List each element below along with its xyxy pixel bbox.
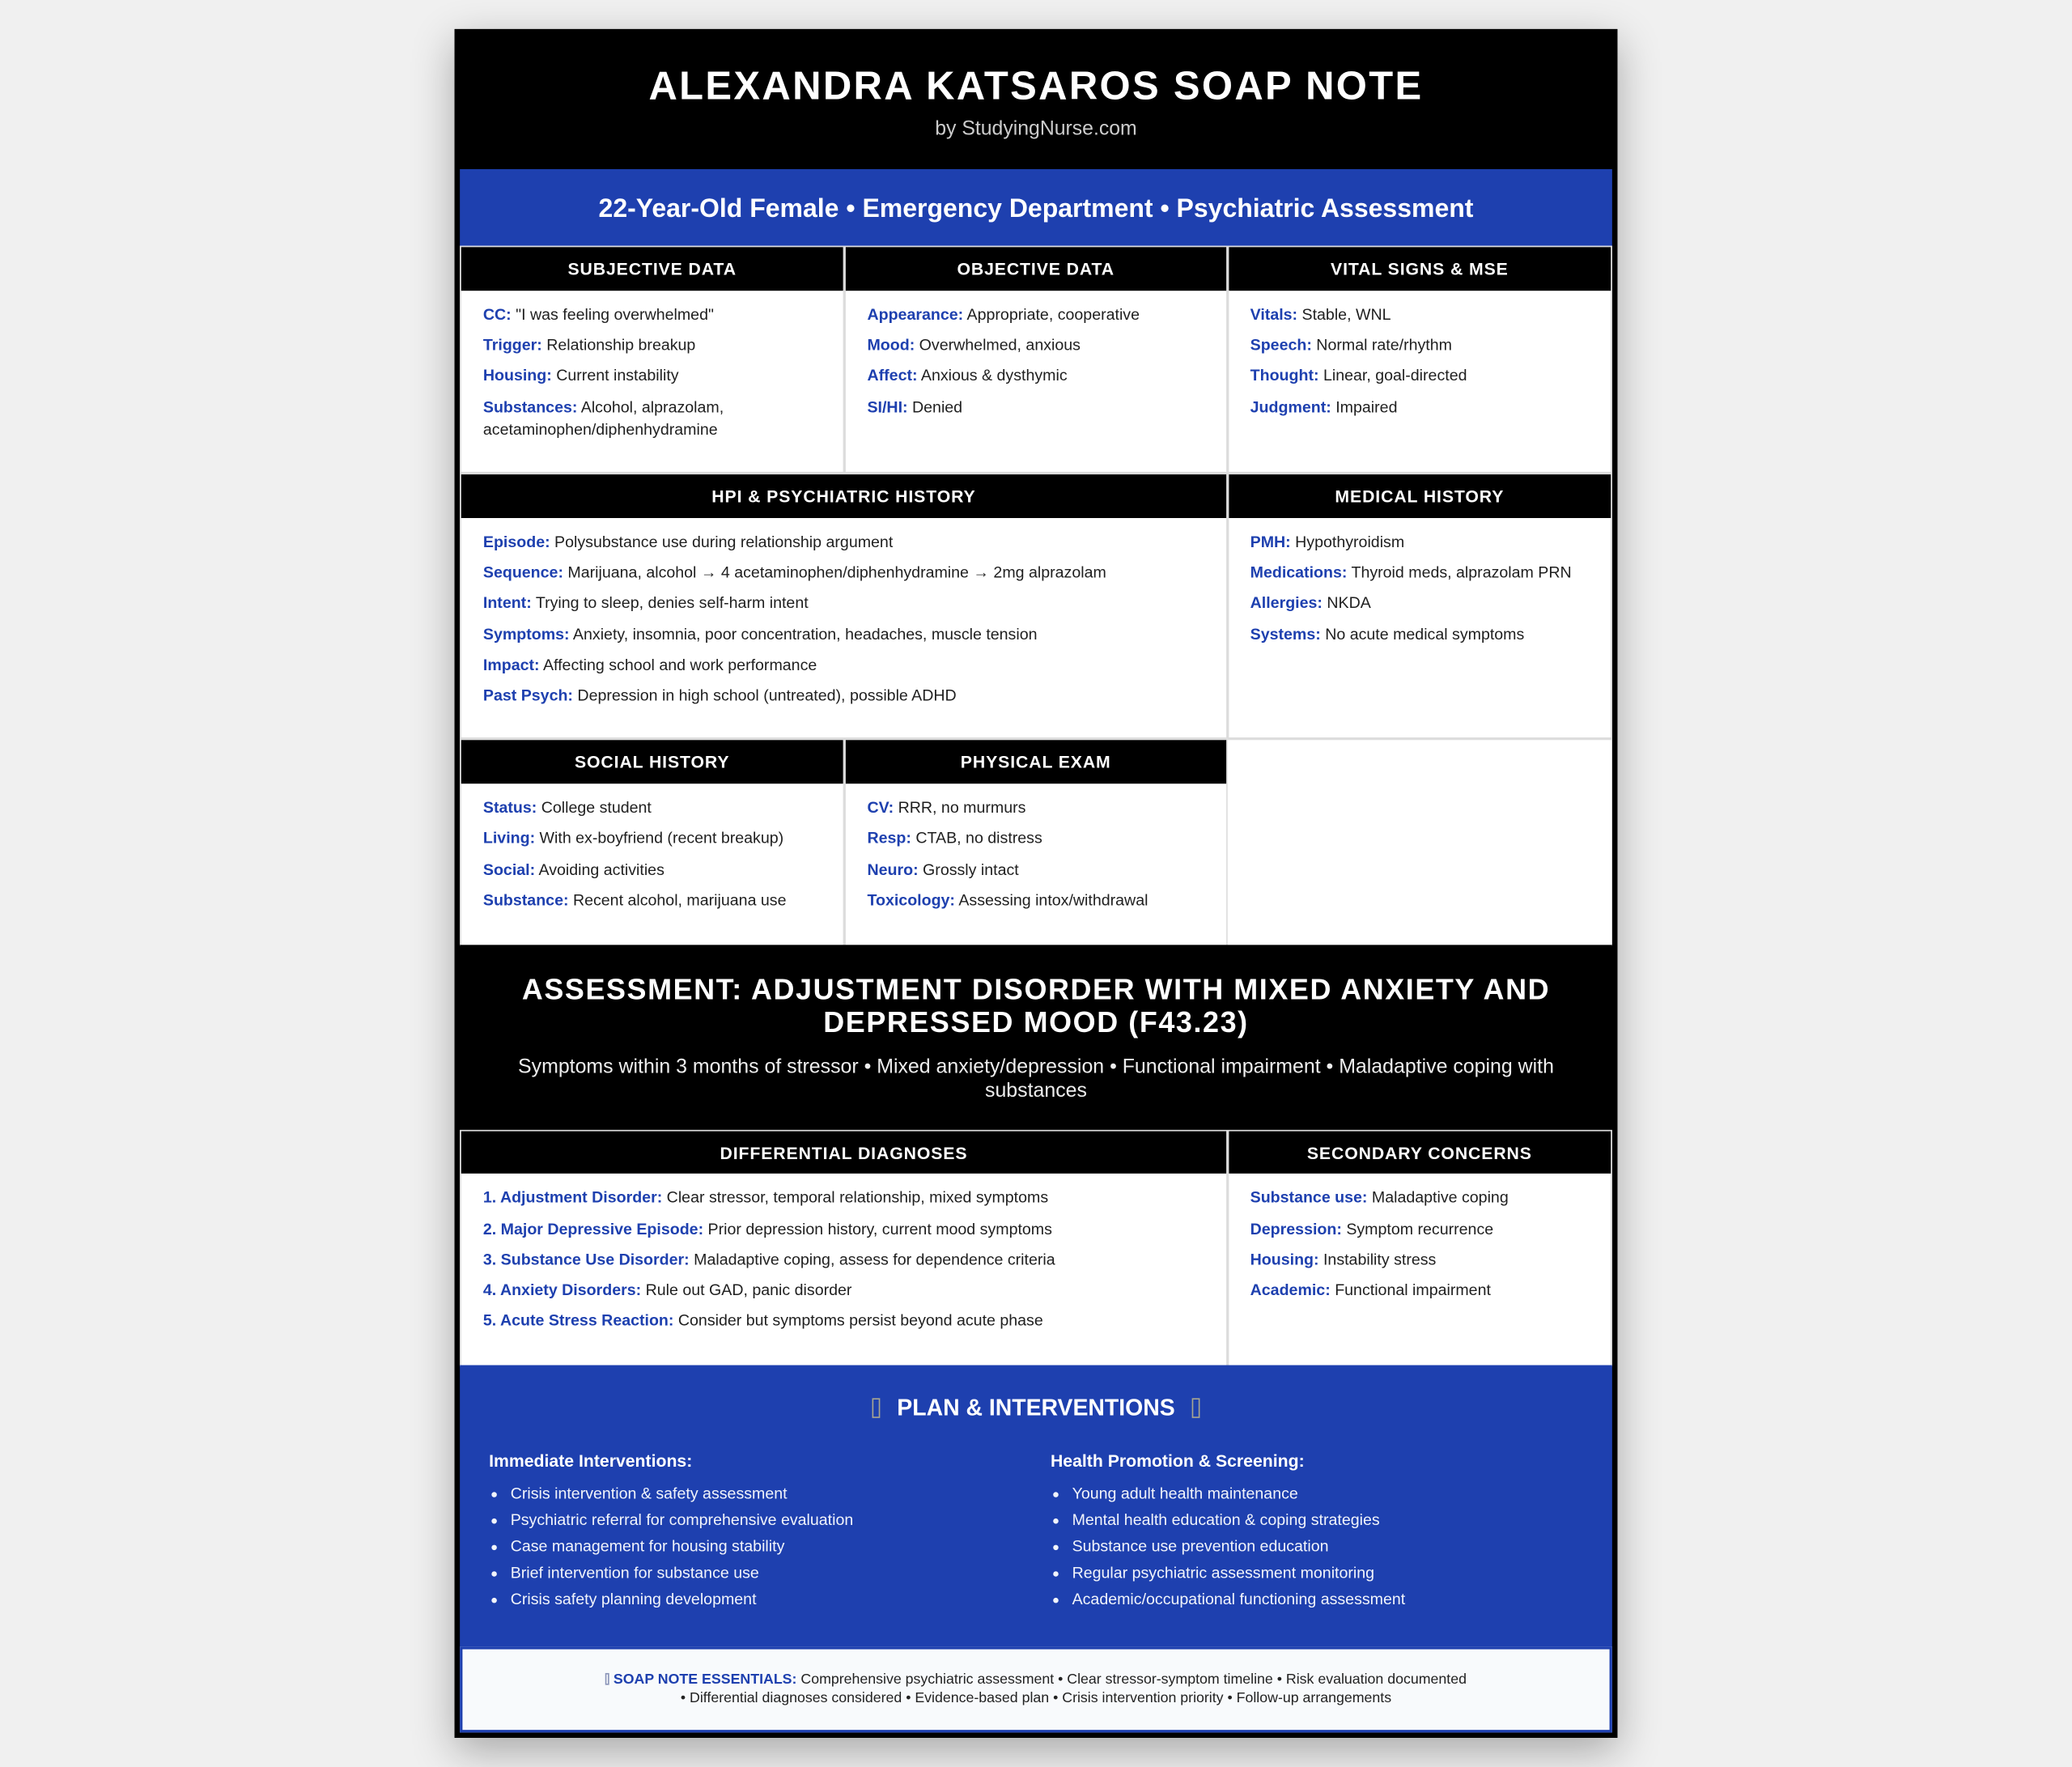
text: subjective items [483, 305, 724, 439]
heading: secondary concerns: SECONDARY CONCERNS [1307, 1142, 1532, 1162]
heading: objective data: OBJECTIVE DATA [957, 259, 1115, 278]
text: vital items: Judgment: Impaired [1250, 397, 1397, 416]
text: exam items: Toxicology: Assessing intox/withdrawal [867, 890, 1148, 909]
panel: vital signs and mse [1227, 246, 1612, 473]
panel: hpi and psychiatric history [460, 473, 1228, 739]
heading: medical history [1229, 474, 1611, 517]
panel: plan and interventions [460, 1366, 1612, 1732]
text: vital items [1250, 305, 1467, 416]
heading: physical exam [845, 740, 1226, 783]
list: health promotion: Academic/occupational functioning assessment [1072, 1591, 1405, 1608]
text: social items: Status: College student [483, 798, 652, 817]
text: exam items: Resp: CTAB, no distress [867, 829, 1042, 847]
list: immediate: Case management for housing stability [511, 1537, 784, 1556]
assessment heading: ASSESSMENT: ADJUSTMENT DISORDER WITH MIXED ANXIETY AND [522, 973, 1550, 1005]
footer callout [460, 1646, 1612, 1732]
list: health promotion: Mental health education & coping strategies [1072, 1511, 1380, 1529]
list: health promotion: Young adult health maintenance [1072, 1485, 1298, 1503]
text: hpi items: Impact: Affecting school and work performance [483, 656, 817, 674]
text: vital items: Thought: Linear, goal-directed [1250, 367, 1467, 385]
text: differential list: 4. Anxiety Disorders: Rule out GAD, panic disorder [483, 1281, 851, 1299]
heading: subjective data: SUBJECTIVE DATA [567, 259, 737, 278]
subheading: health promotion: Health Promotion & Screening: [1051, 1451, 1305, 1471]
text: objective items [867, 305, 1140, 416]
heading: secondary concerns [1229, 1131, 1611, 1174]
patient banner [460, 168, 1612, 246]
text: vital items: Vitals: Stable, WNL [1250, 305, 1391, 324]
assessment criteria: substances [985, 1080, 1087, 1102]
heading: social history [461, 740, 843, 783]
text: differential list: 3. Substance Use Disorder: Maladaptive coping, assess for dependence criteria [483, 1250, 1055, 1268]
list: health promotion: Regular psychiatric assessment monitoring [1072, 1564, 1374, 1582]
text: medical items: PMH: Hypothyroidism [1250, 533, 1404, 550]
list: immediate: Brief intervention for substance use [511, 1564, 759, 1582]
text: secondary items: Academic: Functional impairment [1250, 1281, 1491, 1299]
panel: assessment [460, 945, 1612, 1130]
assessment heading: DEPRESSED MOOD (F43.23) [823, 1005, 1249, 1039]
footer callout: SOAP NOTE ESSENTIALS: Comprehensive psychiatric assessment • Clear stressor-symptom timeline • Risk evaluation documented [614, 1671, 1467, 1688]
footer callout: • Differential diagnoses considered • Evidence-based plan • Crisis intervention priority • Follow-up arrangements [681, 1691, 1391, 1706]
text: social items: Social: Avoiding activities [483, 860, 664, 878]
heading: hpi: HPI & PSYCHIATRIC HISTORY [711, 486, 976, 506]
text: secondary items: Substance use: Maladaptive coping [1250, 1188, 1509, 1207]
list: health promotion [1053, 1485, 1405, 1608]
column: immediate interventions [489, 1451, 853, 1608]
heading: vital signs: VITAL SIGNS & MSE [1331, 259, 1509, 278]
assessment criteria [518, 1056, 1554, 1102]
text: exam items: Neuro: Grossly intact [867, 860, 1019, 878]
list: immediate: Crisis intervention & safety assessment [511, 1485, 788, 1503]
text: hpi items: Intent: Trying to sleep, denies self-harm intent [483, 594, 809, 613]
text: secondary items: Depression: Symptom recurrence [1250, 1219, 1493, 1238]
text: medical items [1250, 533, 1572, 644]
card [455, 29, 1617, 1738]
text: secondary items [1250, 1188, 1509, 1299]
text: hpi items: Past Psych: Depression in high school (untreated), possible ADHD [483, 686, 957, 705]
text: exam items [867, 798, 1148, 909]
text: hpi items [483, 533, 1106, 705]
text: differential list: 2. Major Depressive Episode: Prior depression history, current mood symptoms [483, 1219, 1052, 1238]
text: medical items: Systems: No acute medical symptoms [1250, 625, 1524, 644]
column: health promotion [1051, 1451, 1405, 1608]
text: vital items: Speech: Normal rate/rhythm [1250, 336, 1452, 355]
panel: objective data [844, 246, 1228, 473]
text: social items: Substance: Recent alcohol, marijuana use [483, 890, 787, 909]
text: differential list [483, 1188, 1055, 1330]
panel: physical exam [844, 739, 1228, 945]
heading: vital signs [1229, 247, 1611, 291]
text: differential list: 1. Adjustment Disorder: Clear stressor, temporal relationship, mixed symptoms [483, 1188, 1048, 1207]
text: social items: Living: With ex-boyfriend (recent breakup) [483, 829, 783, 847]
heading: social history: SOCIAL HISTORY [575, 752, 729, 771]
text: objective items: Mood: Overwhelmed, anxious [867, 336, 1081, 355]
heading: physical exam: PHYSICAL EXAM [961, 752, 1111, 771]
panel: empty cell [1226, 739, 1612, 945]
byline: by StudyingNurse.com [935, 117, 1137, 140]
panel: secondary concerns [1227, 1129, 1612, 1366]
panel: social history [460, 739, 844, 945]
text: subjective items: Housing: Current instability [483, 367, 679, 385]
assessment heading [522, 973, 1550, 1039]
text: hpi items: Symptoms: Anxiety, insomnia, poor concentration, headaches, muscle tension [483, 625, 1038, 644]
heading: subjective data [461, 247, 843, 291]
text: objective items: Appearance: Appropriate, cooperative [867, 305, 1140, 324]
text: hpi items: Sequence: Marijuana, alcohol → 4 acetaminophen/diphenhydramine → 2mg alprazolam [483, 563, 1106, 581]
text: medical items: Allergies: NKDA [1250, 594, 1371, 613]
patient banner: 22-Year-Old Female • Emergency Department • Psychiatric Assessment [599, 193, 1473, 223]
text: hpi items: Episode: Polysubstance use during relationship argument [483, 533, 893, 550]
subheading: immediate: Immediate Interventions: [489, 1451, 692, 1471]
panel: medical history [1227, 473, 1612, 739]
heading: hpi [461, 474, 1226, 517]
list: immediate: Psychiatric referral for comprehensive evaluation [511, 1511, 853, 1529]
panel: subjective data [460, 246, 844, 473]
text: subjective items: CC: "I was feeling overwhelmed" [483, 305, 714, 324]
text: subjective items: Trigger: Relationship breakup [483, 336, 695, 355]
panel: differential diagnoses [460, 1129, 1228, 1366]
heading: medical history: MEDICAL HISTORY [1335, 486, 1504, 506]
text: objective items: Affect: Anxious & dysthymic [867, 367, 1068, 385]
plan heading: PLAN & INTERVENTIONS [897, 1394, 1175, 1421]
text: social items [483, 798, 787, 909]
text: secondary items: Housing: Instability stress [1250, 1250, 1436, 1268]
list: immediate: Crisis safety planning development [511, 1591, 757, 1608]
text: subjective items: Substances: Alcohol, alprazolam, acetaminophen/diphenhydramine [483, 397, 724, 439]
text: exam items: CV: RRR, no murmurs [867, 798, 1025, 817]
list: immediate [491, 1485, 853, 1608]
list: health promotion: Substance use prevention education [1072, 1537, 1329, 1556]
header [460, 34, 1612, 169]
text: objective items: SI/HI: Denied [867, 397, 962, 416]
heading: objective data [845, 247, 1226, 291]
assessment criteria: Symptoms within 3 months of stressor • Mixed anxiety/depression • Functional impairment • Maladaptive coping with [518, 1056, 1554, 1079]
text: medical items: Medications: Thyroid meds, alprazolam PRN [1250, 563, 1572, 581]
text: differential list: 5. Acute Stress Reaction: Consider but symptoms persist beyond acute phase [483, 1311, 1043, 1330]
title: ALEXANDRA KATSAROS SOAP NOTE [648, 65, 1424, 108]
heading: differential diagnoses [461, 1131, 1226, 1174]
heading: differential diagnoses: DIFFERENTIAL DIAGNOSES [720, 1142, 967, 1162]
